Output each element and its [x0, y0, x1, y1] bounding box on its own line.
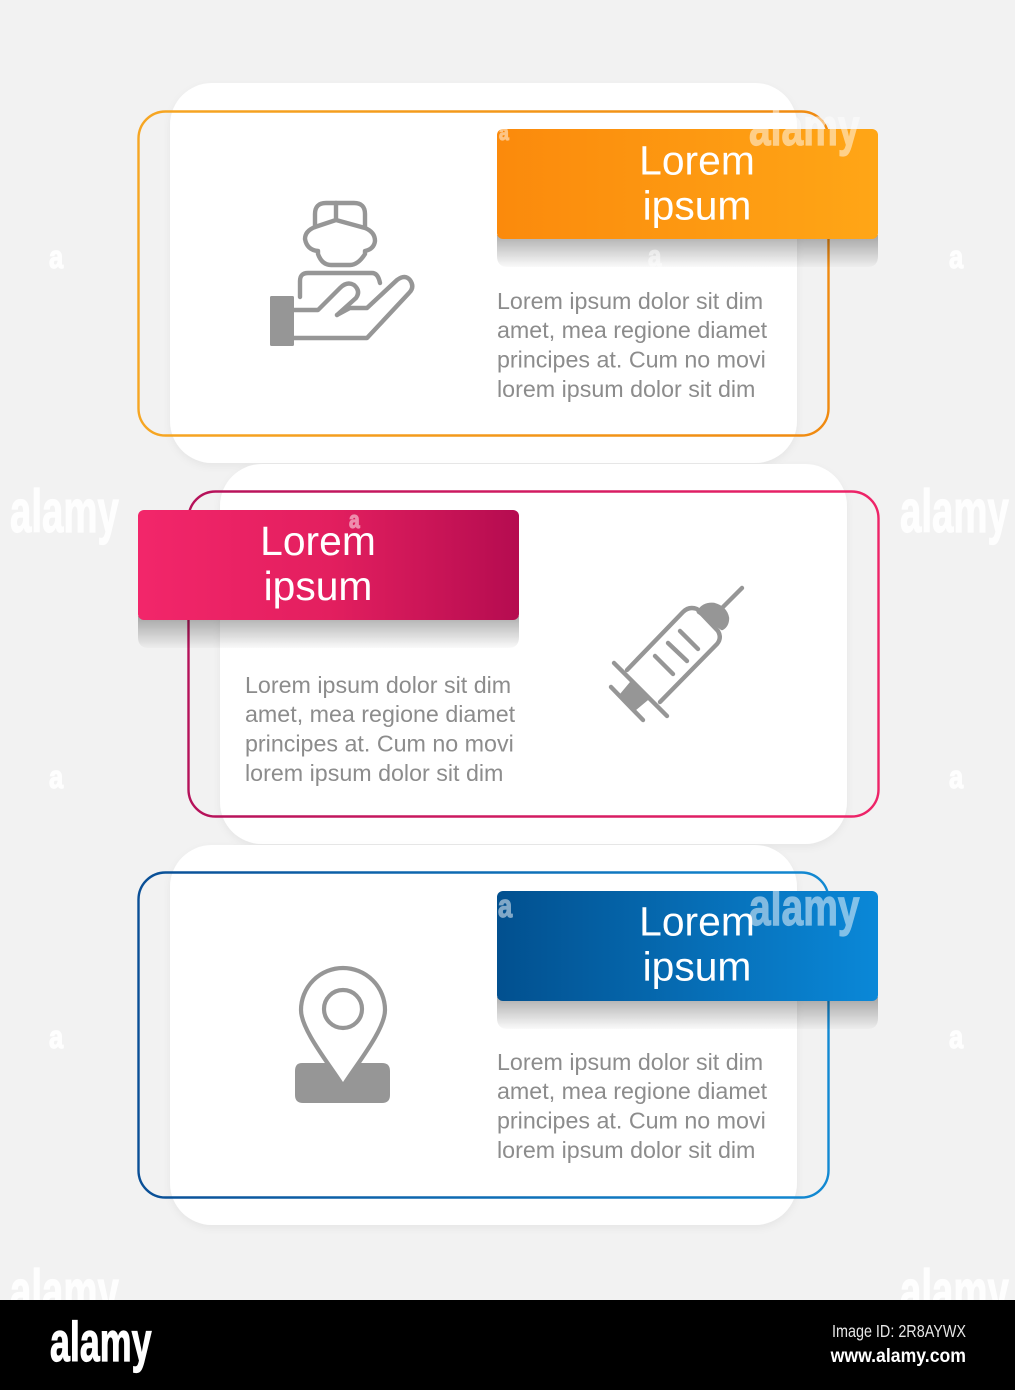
panel 2 label shadow	[138, 616, 519, 648]
watermark: alamy logos over labels: a	[648, 238, 662, 273]
footer bar	[0, 1300, 1015, 1390]
icon: syringe	[611, 588, 742, 720]
panel 3 heading: Lorem	[639, 898, 755, 944]
panel 1 label bar	[497, 129, 878, 239]
footer url: www.alamy.com	[830, 1344, 966, 1366]
icon: hand holding doctor	[293, 203, 412, 338]
watermark: alamy logos on background: a	[949, 760, 964, 796]
watermark: alamy logos over labels: a	[499, 121, 510, 146]
panel 2 body text: Lorem ipsum dolor sit dim	[245, 672, 511, 698]
panel 2 body text: amet, mea regione diamet	[245, 701, 516, 727]
panel 1 text backing	[497, 267, 797, 407]
watermark: alamy logos over labels: a	[349, 506, 360, 534]
panel 3: blue	[138, 845, 878, 1225]
watermark: alamy logos on background: a	[49, 240, 64, 276]
panel 1 heading: Lorem	[639, 138, 755, 184]
footer logo: alamy	[50, 1310, 152, 1373]
watermark: alamy logos on background: a	[949, 240, 964, 276]
panel 2 text backing	[220, 648, 530, 788]
panel 1 heading: ipsum	[643, 182, 751, 228]
panel 2 white card	[220, 464, 847, 844]
panel 3 label bar	[497, 891, 878, 1001]
watermark: alamy logos on background: a	[49, 1020, 64, 1056]
panel 2: magenta	[138, 464, 878, 844]
panel 2 body text: principes at. Cum no movi	[245, 730, 514, 756]
panel 1 outline	[138, 112, 828, 436]
icon: map pin on base	[295, 968, 390, 1103]
icon: hand cuff	[270, 296, 294, 346]
panel 1 white card	[170, 83, 797, 463]
watermark: alamy logos on background: alamy	[900, 477, 1009, 545]
panel 1: orange	[138, 83, 878, 463]
panel 2 outline	[188, 492, 878, 816]
watermark: alamy logos over labels: a	[498, 889, 513, 925]
panel 3 label shadow	[497, 997, 878, 1029]
panel 2 label bar	[138, 510, 519, 620]
watermark: alamy logos on background: alamy	[900, 1257, 1009, 1325]
panel 3 white card	[170, 845, 797, 1225]
watermark: alamy logos on background	[10, 240, 1009, 1325]
panel 1 body text: principes at. Cum no movi	[497, 346, 766, 372]
panel 1 body text: amet, mea regione diamet	[497, 317, 768, 343]
watermark: alamy logos over labels: alamy	[749, 97, 860, 156]
watermark: alamy logos on background: alamy	[10, 1257, 119, 1325]
watermark: alamy logos on background: a	[49, 760, 64, 796]
panel 3 body text: amet, mea regione diamet	[497, 1078, 768, 1104]
panel 3 text backing	[497, 1029, 797, 1169]
watermark: alamy logos on background: alamy	[10, 477, 119, 545]
watermark: alamy logos over labels: alamy	[749, 877, 860, 936]
panel 2 heading: Lorem	[260, 518, 376, 564]
watermark: alamy logos over labels	[349, 97, 860, 936]
panel 3 body text: lorem ipsum dolor sit dim	[497, 1137, 755, 1163]
panel 1 label shadow	[497, 235, 878, 267]
panel 2 body text: lorem ipsum dolor sit dim	[245, 760, 503, 786]
panel 1 body text: Lorem ipsum dolor sit dim	[497, 288, 763, 314]
panel 1 body text: lorem ipsum dolor sit dim	[497, 376, 755, 402]
panel 3 outline	[138, 872, 828, 1198]
panel 3 body text: Lorem ipsum dolor sit dim	[497, 1049, 763, 1075]
panel 3 heading: ipsum	[643, 944, 751, 990]
panel 3 body text: principes at. Cum no movi	[497, 1108, 766, 1134]
watermark: alamy logos on background: a	[949, 1020, 964, 1056]
footer image id: Image ID: 2R8AYWX	[832, 1322, 966, 1341]
panel 2 heading: ipsum	[264, 563, 372, 609]
